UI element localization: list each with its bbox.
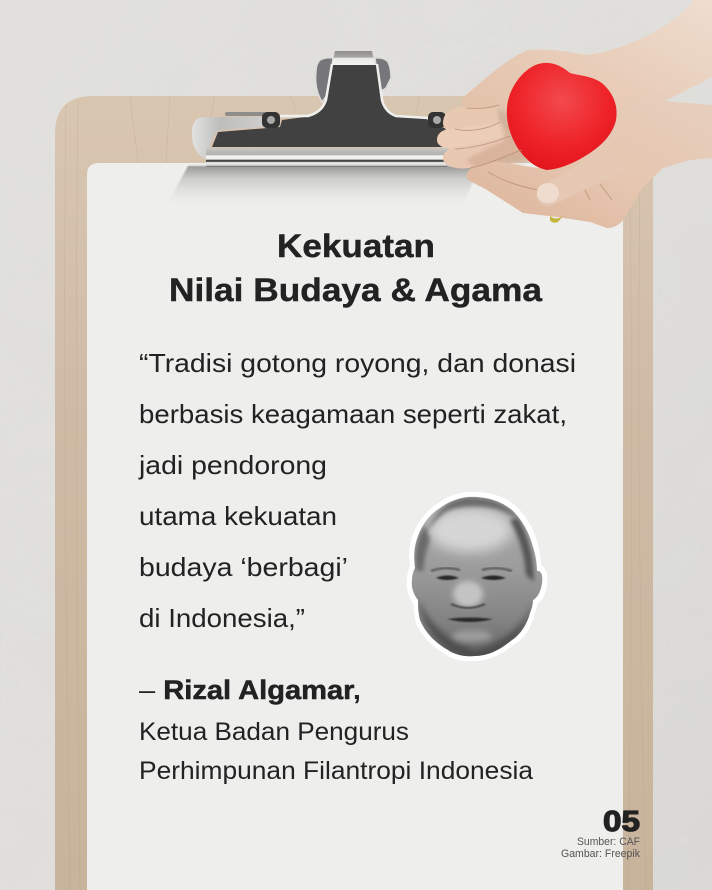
nose (453, 581, 483, 607)
clip: dark plate (212, 65, 450, 147)
hair left (415, 525, 430, 572)
metal clip (192, 51, 450, 167)
thumb (537, 154, 622, 206)
source credits: Sumber: CAF (577, 836, 640, 848)
title: Kekuatan (277, 228, 435, 264)
paper sheet (87, 163, 623, 890)
title (169, 228, 542, 308)
clip: left silver lever (192, 117, 263, 160)
clip: bright edge right (377, 64, 428, 118)
eyes (436, 576, 506, 580)
source credits: Gambar: Freepik (561, 848, 640, 860)
attribution: – Rizal Algamar , (139, 675, 361, 705)
attribution (139, 675, 533, 785)
quote text: budaya ‘berbagi’ (139, 552, 348, 582)
heart (507, 63, 617, 170)
jaw shading (418, 602, 532, 656)
clip: top tab (332, 51, 375, 65)
ring (550, 216, 563, 223)
quote text: berbasis keagamaan seperti zakat, (139, 399, 567, 429)
middle finger (437, 122, 512, 149)
upper hand and arm (462, 0, 712, 130)
clip: hinge left (316, 58, 333, 102)
quote text: di Indonesia,” (139, 603, 305, 633)
lower hand and forearm (467, 98, 712, 228)
clip: bolt left (262, 112, 280, 128)
ring finger (443, 136, 524, 169)
quote text: “Tradisi gotong royong, dan donasi (139, 348, 576, 378)
hair top (427, 496, 519, 531)
brows (431, 568, 512, 571)
face (412, 496, 542, 656)
chin highlight (452, 630, 492, 642)
attribution: Perhimpunan Filantropi Indonesia (139, 757, 533, 785)
clip: bright edge left (280, 64, 332, 116)
clip: silver rod (206, 148, 448, 167)
clip: thin bar (225, 112, 265, 116)
clip: bolt right (428, 112, 446, 128)
forehead highlight (428, 508, 512, 552)
index finger (443, 107, 500, 134)
clip: hinge right (375, 58, 391, 92)
attribution: Ketua Badan Pengurus (139, 718, 409, 746)
clip shadow on paper (166, 166, 480, 207)
hands holding heart (437, 0, 712, 228)
finger creases (455, 105, 612, 200)
mouth (447, 618, 493, 622)
title: Nilai Budaya & Agama (169, 272, 542, 308)
sticker outline (407, 492, 547, 661)
dark temple right (510, 518, 534, 582)
portrait sticker (405, 490, 550, 665)
clipboard wooden board (55, 96, 653, 890)
quote text (138, 348, 576, 633)
quote text: jadi pendorong (138, 450, 327, 480)
thumb nail (537, 183, 559, 203)
source credits (561, 836, 640, 860)
page number: 05 (603, 806, 640, 838)
palm shadow (465, 110, 528, 170)
quote text: utama kekuatan (139, 501, 337, 531)
